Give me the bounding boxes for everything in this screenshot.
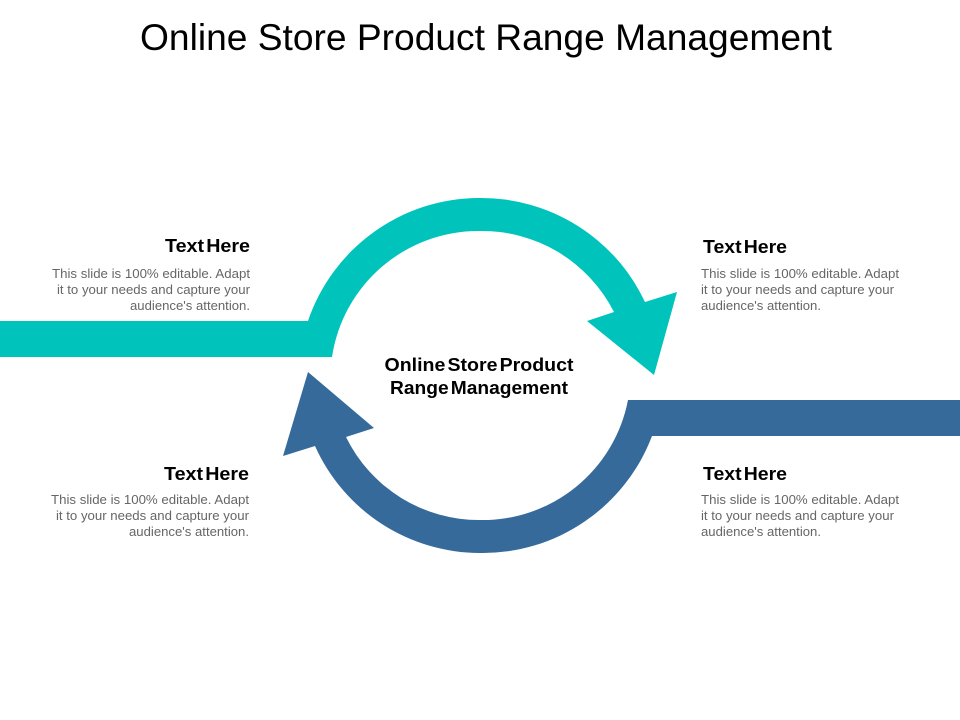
text block: bottom right: Text Here: [703, 464, 787, 484]
center label: Online Store Product: [384, 355, 574, 375]
text block: bottom left: Text Here: [164, 464, 249, 484]
text block: top left: Text Here: [165, 236, 250, 256]
arrow: blue bottom arc: [283, 372, 960, 553]
text block: top right: Text Here: [703, 237, 787, 257]
text block: top left: it to your needs and capture your: [57, 283, 250, 297]
text block: bottom left: audience's attention.: [129, 525, 249, 539]
text block: top left: This slide is 100% editable. Adapt: [52, 267, 251, 281]
text block: bottom left: This slide is 100% editable. Adapt: [51, 493, 250, 507]
text block: bottom right: audience's attention.: [701, 525, 821, 539]
text block: top right: it to your needs and capture your: [701, 283, 894, 297]
text block: bottom right: [701, 464, 900, 539]
text block: top right: This slide is 100% editable. Adapt: [701, 267, 900, 281]
center label: [384, 355, 574, 398]
center label: Range Management: [390, 378, 568, 398]
text block: top left: audience's attention.: [130, 299, 250, 313]
arrow: teal top arc: [0, 198, 677, 375]
text block: bottom left: it to your needs and capture your: [56, 509, 249, 523]
text block: top right: [701, 237, 900, 313]
title: Online Store Product Range Management: [140, 17, 833, 58]
text block: bottom left: [51, 464, 250, 539]
text block: top left: [52, 236, 251, 313]
text block: top right: audience's attention.: [701, 299, 821, 313]
text block: bottom right: it to your needs and capture your: [701, 509, 894, 523]
text block: bottom right: This slide is 100% editable. Adapt: [701, 493, 900, 507]
